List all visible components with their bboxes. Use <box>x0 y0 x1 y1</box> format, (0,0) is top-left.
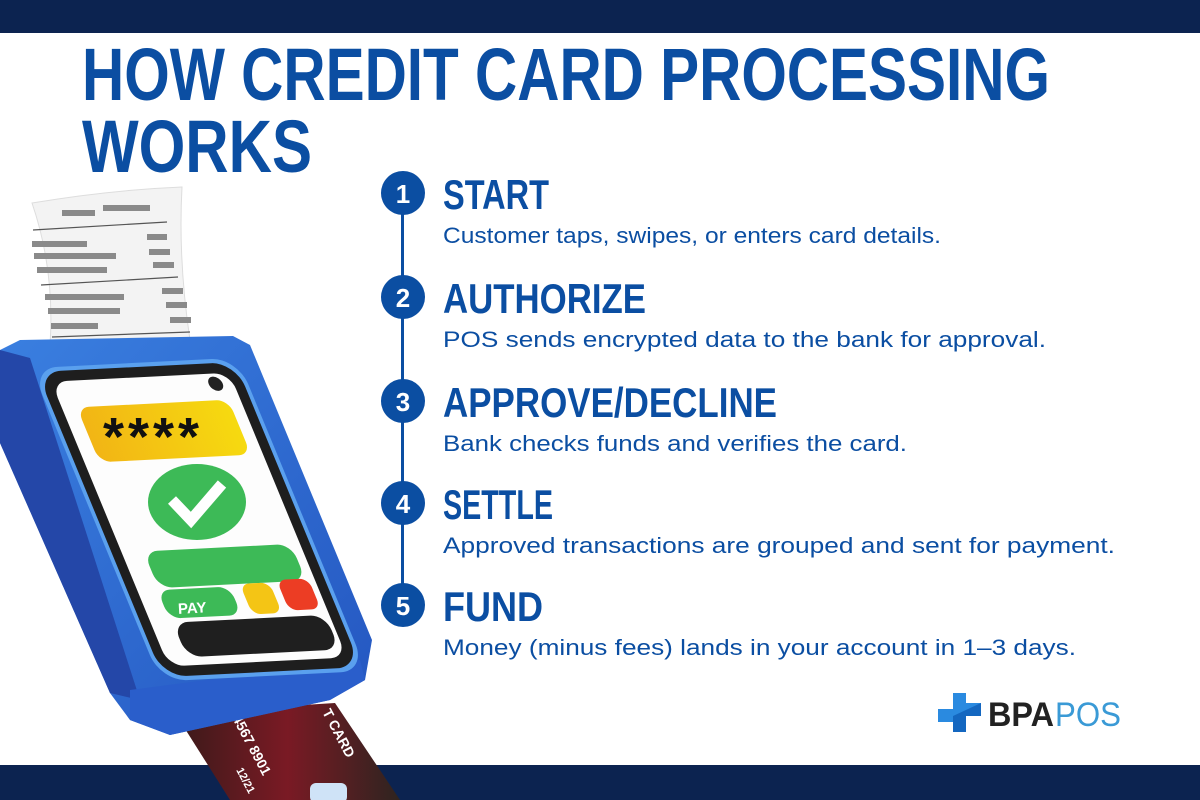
logo: BPAPOS: POS <box>1055 696 1121 734</box>
terminal body <box>0 336 372 735</box>
credit card <box>175 703 400 800</box>
timeline line <box>401 200 404 610</box>
step 1: Customer taps, swipes, or enters card details. <box>443 223 941 248</box>
receipt paper <box>32 187 191 348</box>
step 5: 5 <box>396 591 410 621</box>
step 2: 2 <box>396 283 410 313</box>
step 5 <box>381 583 1076 660</box>
step 4 <box>381 481 1115 558</box>
logo: BPAPOS <box>938 693 1121 734</box>
step 5: Money (minus fees) lands in your account in 1–3 days. <box>443 635 1076 660</box>
step 4: SETTLE <box>443 481 553 528</box>
step 2 <box>381 275 1046 352</box>
step 3: Bank checks funds and verifies the card. <box>443 431 907 456</box>
step 3 <box>381 379 907 456</box>
steps <box>381 171 1115 660</box>
screen text: stars: **** <box>103 407 203 467</box>
step 1 <box>381 171 941 248</box>
bottom bar <box>0 765 1200 800</box>
step 5: FUND <box>443 583 543 630</box>
step 3: 3 <box>396 387 410 417</box>
step 4: 4 <box>396 489 411 519</box>
illustration: card terminal <box>0 187 400 800</box>
credit card: T CARD <box>319 706 358 760</box>
logo: BPAPOS: BPA <box>988 696 1054 734</box>
step 2: POS sends encrypted data to the bank for approval. <box>443 327 1046 352</box>
title: WORKS <box>82 105 312 188</box>
step 3: APPROVE/DECLINE <box>443 379 777 426</box>
screen <box>31 358 367 681</box>
top bar <box>0 0 1200 33</box>
step 1: START <box>443 171 549 218</box>
credit card: 4567 8901 <box>229 712 275 778</box>
step 1: 1 <box>396 179 410 209</box>
check icon <box>148 464 246 540</box>
credit card: 12/21 <box>233 766 257 796</box>
step 2: AUTHORIZE <box>443 275 646 322</box>
step 4: Approved transactions are grouped and sent for payment. <box>443 533 1115 558</box>
title <box>82 33 1050 188</box>
pay label: PAY <box>178 599 207 618</box>
